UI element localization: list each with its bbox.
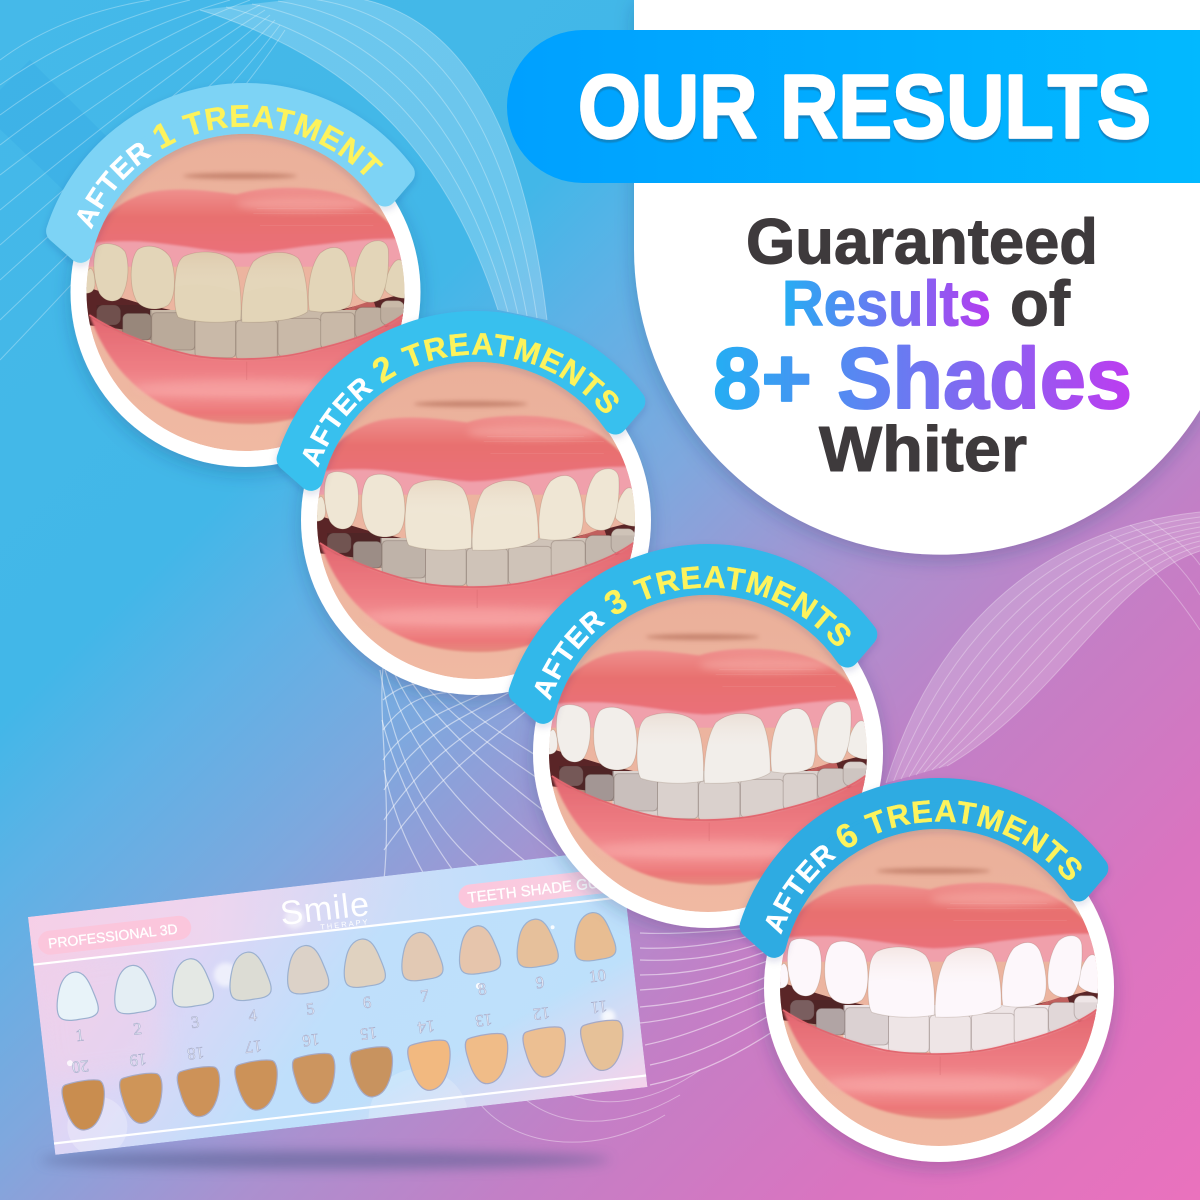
card face xyxy=(28,855,648,1155)
result circle: after 2 treatments xyxy=(274,311,658,710)
headline: guaranteed results: of xyxy=(1010,268,1071,340)
header pill: our results xyxy=(507,30,1200,183)
result circle: after 6 treatments xyxy=(738,778,1123,1177)
bottom row numbers (inverted) xyxy=(71,997,608,1077)
banner: after 1 treatment: AFTER 1 TREATMENT xyxy=(77,104,384,230)
top row numbers xyxy=(75,966,607,1045)
bottom row numbers (inverted): 12 xyxy=(532,1003,551,1024)
bottom row numbers (inverted): 15 xyxy=(359,1023,378,1044)
banner: after 3 treatments xyxy=(506,544,878,730)
mouth photo illustration, 1 treatment xyxy=(77,133,412,451)
banner: after 3 treatments: AFTER 3 TREATMENTS xyxy=(534,566,851,701)
white ring xyxy=(70,117,420,467)
pill: professional 3D xyxy=(37,915,193,956)
headline: guaranteed results: 8+ xyxy=(713,331,812,427)
panel: white header shape xyxy=(634,0,1200,555)
logo: Smile Therapy: Smile xyxy=(278,885,372,933)
top row of shade teeth 1-10 xyxy=(53,910,617,1022)
top row numbers: 2 xyxy=(132,1019,143,1039)
banner: after 1 treatment xyxy=(44,83,416,268)
result circle: after 1 treatment xyxy=(44,83,428,481)
bottom row numbers (inverted): 14 xyxy=(416,1016,436,1037)
top row numbers: 7 xyxy=(419,986,430,1006)
bottom row numbers (inverted): 20 xyxy=(71,1056,90,1077)
top row numbers: 10 xyxy=(588,966,607,986)
mouth photo illustration, 3 treatments xyxy=(539,594,874,912)
background ribbon: right xyxy=(886,512,1200,783)
pill: professional 3D: PROFESSIONAL 3D xyxy=(47,921,178,951)
background line art: top-left fan xyxy=(0,0,285,360)
background line art: right of card xyxy=(477,925,780,1142)
header pill: our results: OUR RESULTS xyxy=(578,58,1151,158)
background line art: centre mesh xyxy=(380,668,575,885)
headline: guaranteed results: Whiter xyxy=(819,413,1027,485)
mouth photo illustration, 2 treatments xyxy=(307,361,642,679)
top row numbers: 8 xyxy=(477,979,488,999)
bottom row numbers (inverted): 17 xyxy=(243,1036,263,1057)
banner: after 2 treatments xyxy=(274,311,646,496)
white ring xyxy=(533,578,883,928)
bottom row of shade teeth 20-11 xyxy=(61,1019,627,1132)
top row numbers: 9 xyxy=(535,973,545,992)
teeth shade guide card xyxy=(28,855,648,1155)
background ribbon: top centre xyxy=(200,0,547,320)
mouth photo illustration, 6 treatments xyxy=(770,828,1105,1146)
pill: teeth shade guide: TEETH SHADE GUIDE xyxy=(467,872,624,907)
headline: guaranteed results: Shades xyxy=(837,331,1132,427)
top row numbers: 4 xyxy=(247,1006,259,1025)
banner: after 6 treatments: AFTER 6 TREATMENTS xyxy=(766,800,1082,935)
headline: guaranteed results: Guaranteed xyxy=(746,206,1098,278)
white ring xyxy=(764,812,1114,1162)
bottom row numbers (inverted): 13 xyxy=(474,1010,493,1031)
background: darker diagonal band xyxy=(0,60,290,360)
headline: guaranteed results xyxy=(713,206,1132,485)
top row numbers: 6 xyxy=(362,992,372,1012)
bottom row numbers (inverted): 18 xyxy=(186,1043,205,1064)
top row numbers: 1 xyxy=(75,1025,85,1045)
bottom row numbers (inverted): 19 xyxy=(128,1049,148,1070)
logo: Smile Therapy: THERAPY xyxy=(320,917,370,932)
top row numbers: 3 xyxy=(190,1012,200,1032)
top row numbers: 5 xyxy=(305,999,316,1019)
headline: guaranteed results: Results xyxy=(782,268,991,340)
divider lines xyxy=(33,897,646,1144)
bottom row numbers (inverted): 16 xyxy=(301,1030,320,1050)
result circle: after 3 treatments xyxy=(506,544,892,943)
banner: after 6 treatments xyxy=(738,778,1110,964)
bottom row numbers (inverted): 11 xyxy=(590,997,608,1017)
white ring xyxy=(301,345,651,695)
banner: after 2 treatments: AFTER 2 TREATMENTS xyxy=(302,333,619,468)
card ground shadow xyxy=(40,1151,610,1169)
